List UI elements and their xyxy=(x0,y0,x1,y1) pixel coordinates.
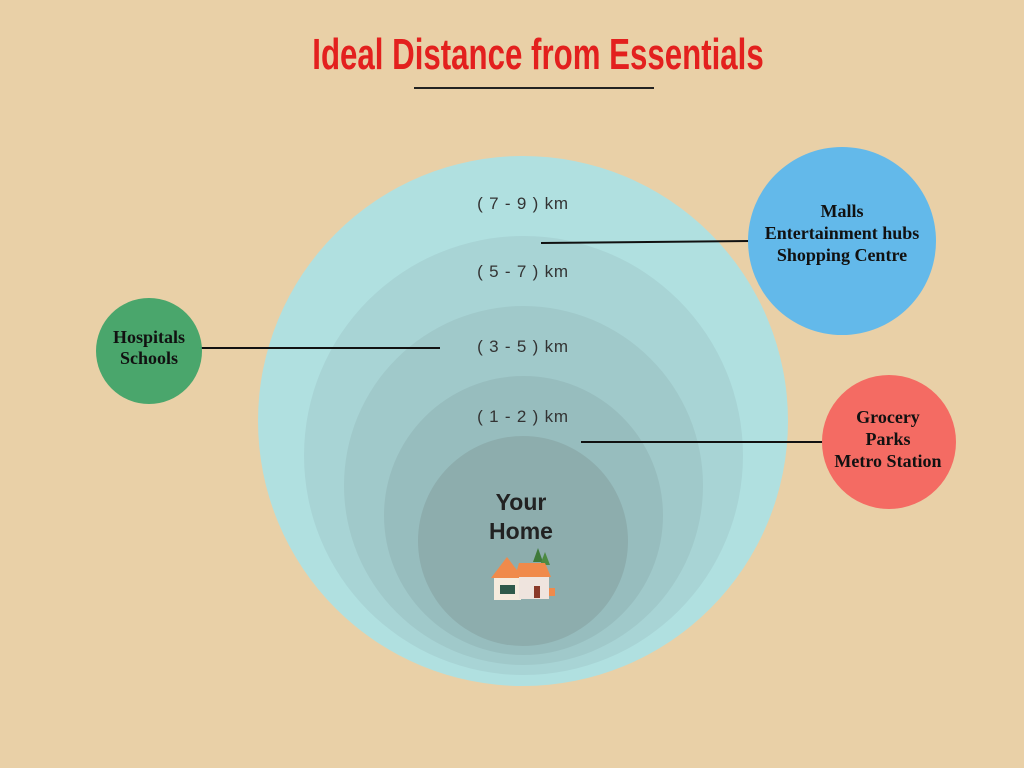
home circle: Your xyxy=(496,489,546,515)
connector: malls xyxy=(541,241,750,243)
bubble: grocery: Grocery xyxy=(856,407,920,427)
bubble: malls: Malls xyxy=(820,201,864,221)
bubble: malls xyxy=(748,147,936,335)
ring: 3-5 km: ( 3 - 5 ) km xyxy=(477,337,569,356)
bubble: hospitals: Hospitals xyxy=(113,327,185,347)
ring: 5-7 km xyxy=(304,236,743,675)
bubble: hospitals xyxy=(96,298,202,404)
title: Ideal Distance from Essentials xyxy=(312,30,764,79)
home circle xyxy=(418,436,628,646)
ring: 1-2 km: ( 1 - 2 ) km xyxy=(477,407,569,426)
connector: hospitals xyxy=(200,347,440,349)
ring: 3-5 km xyxy=(344,306,703,665)
connector: grocery xyxy=(581,441,823,443)
icon: house xyxy=(491,548,555,600)
bubble: malls: Entertainment hubs xyxy=(765,223,919,243)
bubble: grocery: Metro Station xyxy=(834,451,942,471)
bubble: grocery: Parks xyxy=(866,429,910,449)
bubble: hospitals: Schools xyxy=(120,348,178,368)
ring: 7-9 km: ( 7 - 9 ) km xyxy=(477,194,569,213)
home circle: Home xyxy=(489,518,553,544)
bubble: grocery xyxy=(822,375,956,509)
bubble: malls: Shopping Centre xyxy=(777,245,907,265)
title underline xyxy=(414,87,654,89)
ring: 5-7 km: ( 5 - 7 ) km xyxy=(477,262,569,281)
ring: 1-2 km xyxy=(384,376,663,655)
